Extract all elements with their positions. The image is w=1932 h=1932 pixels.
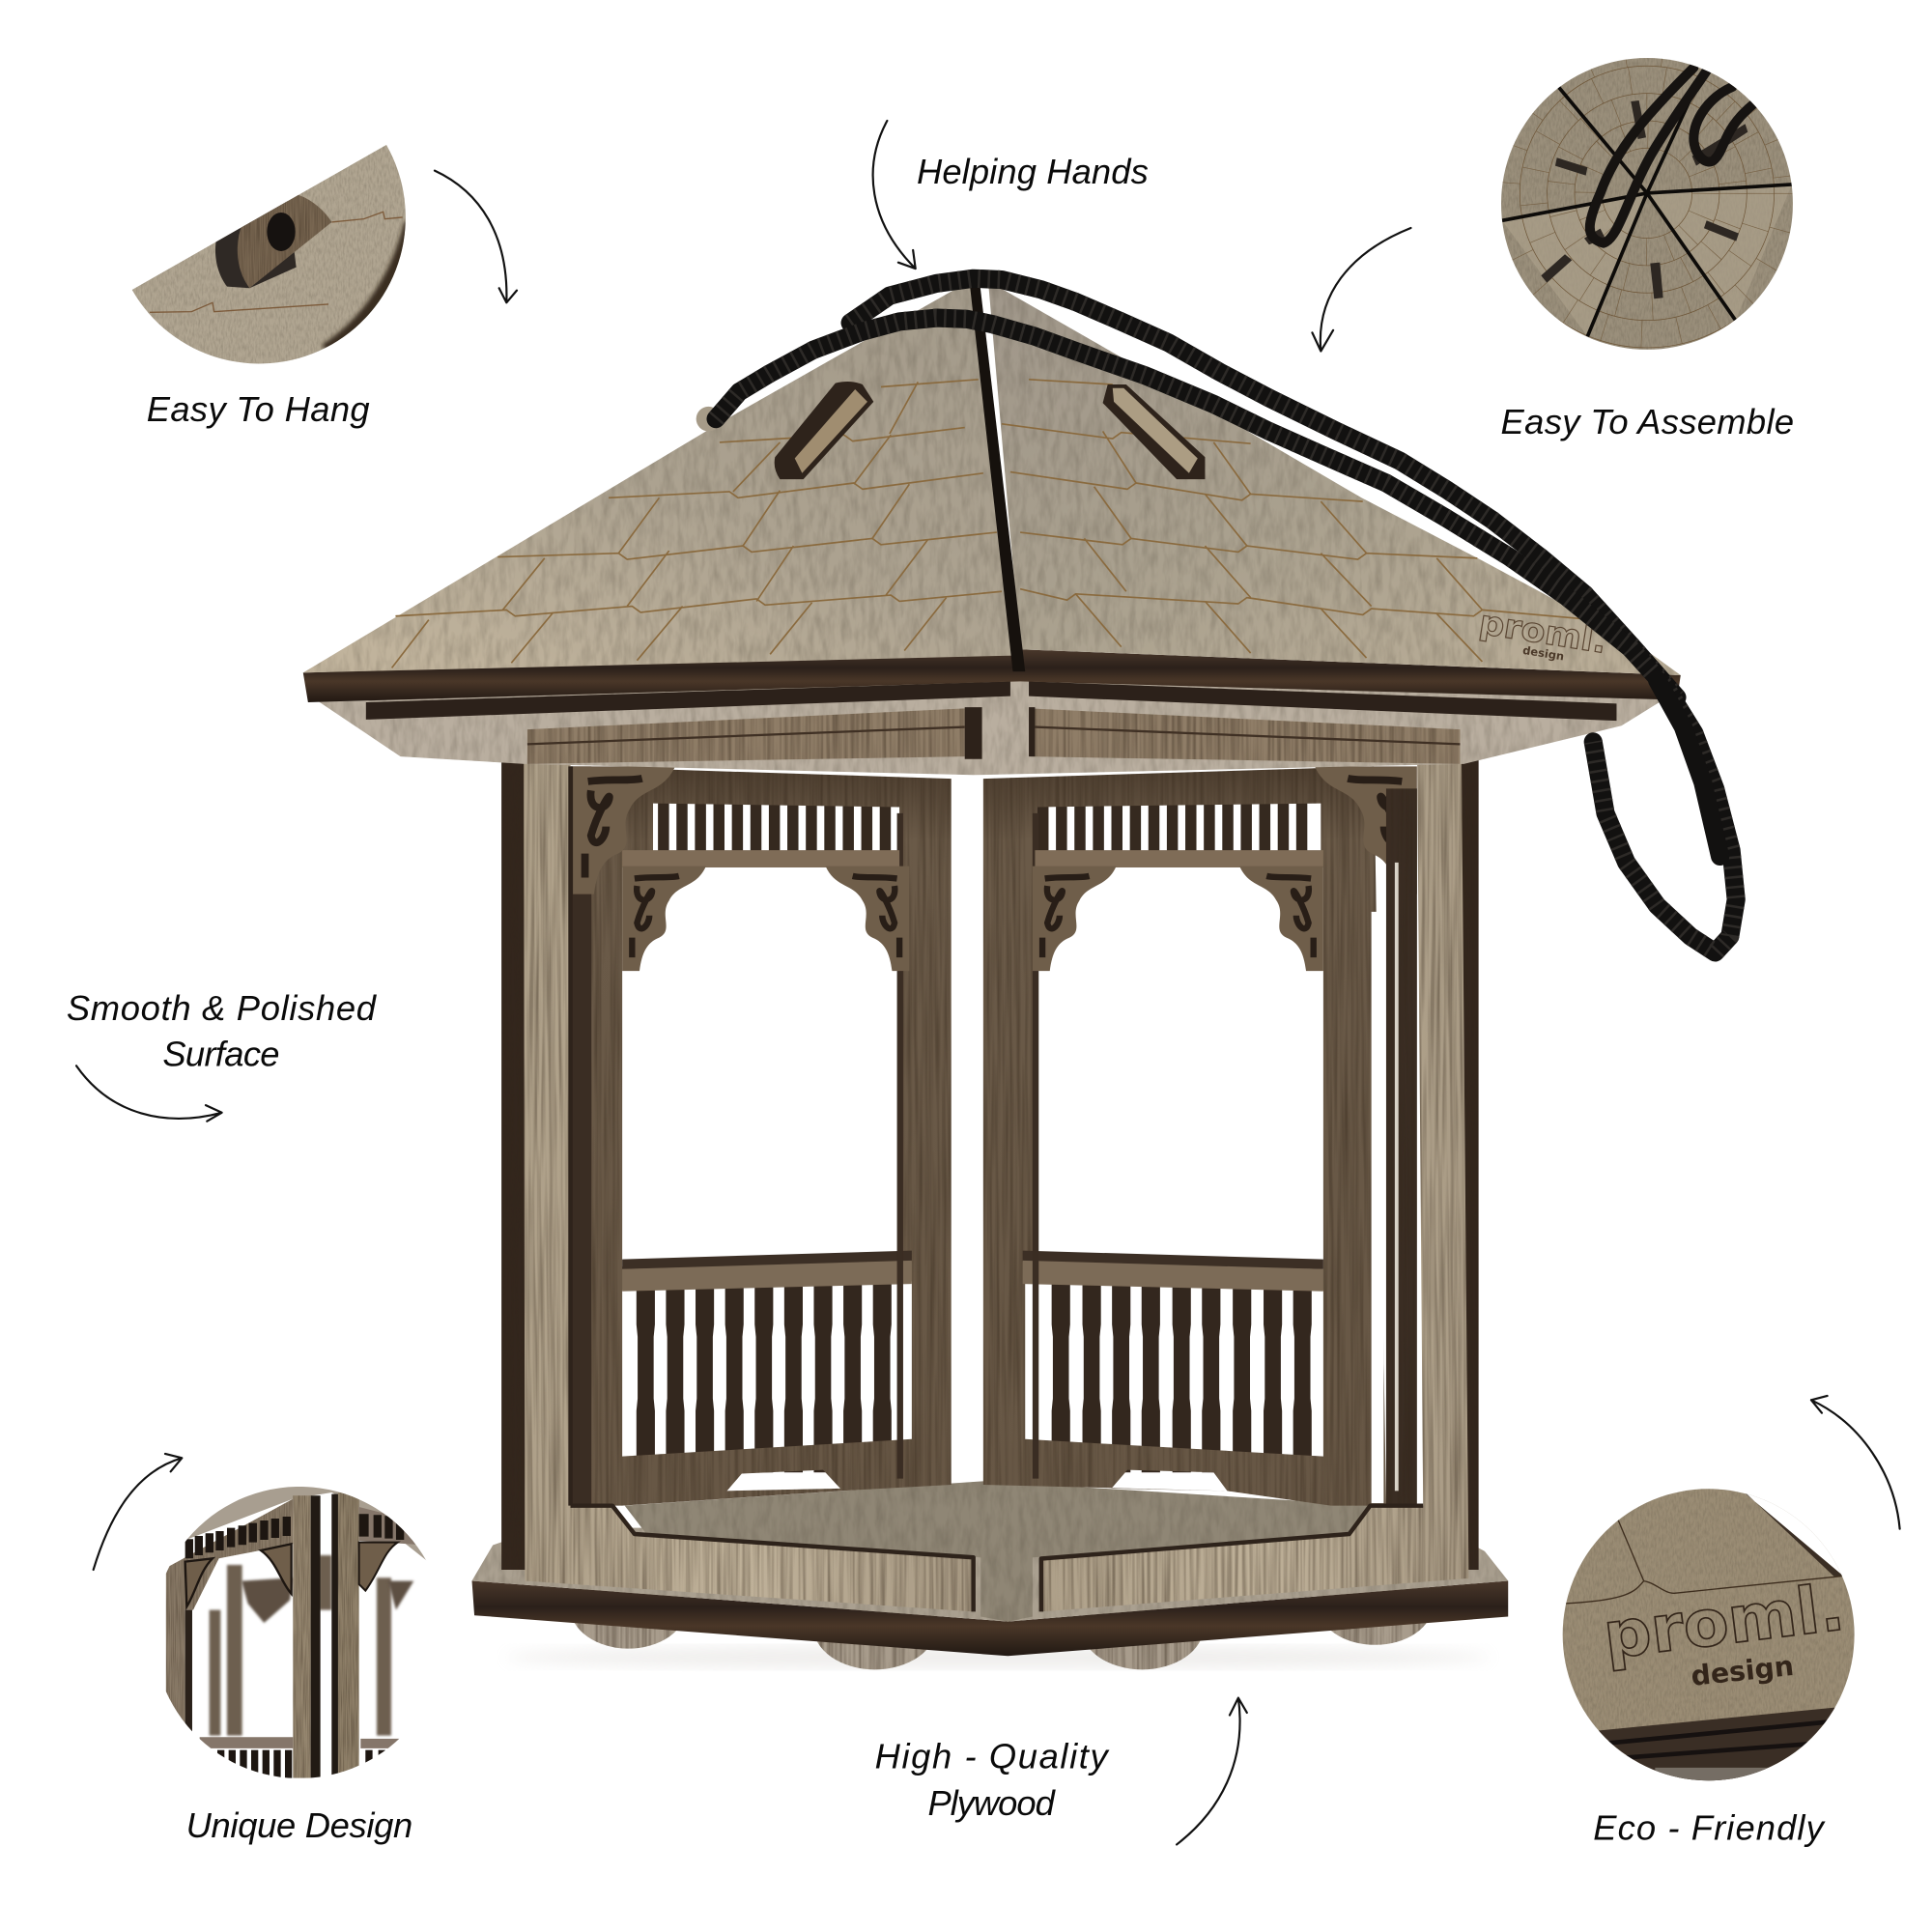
roof underside eave	[308, 671, 1667, 775]
detail circle: engraved logo: design	[1690, 1650, 1795, 1692]
gazebo bird feeder	[303, 278, 1736, 1669]
second roof strip	[366, 681, 1616, 721]
engraved logo on roof: design	[1521, 643, 1565, 664]
detail circle: engraved logo: proml.	[1600, 1570, 1848, 1673]
roof fascia	[303, 649, 1681, 702]
base plate top	[472, 1528, 1508, 1622]
outer corner brackets	[573, 766, 1417, 895]
left window panel	[571, 766, 952, 1506]
label: Smooth & Polished Surface	[67, 988, 378, 1073]
arrow: assemble	[1312, 228, 1410, 352]
label: High - Quality Plywood: High - Quality	[875, 1736, 1110, 1776]
arrow: helping hands	[873, 121, 916, 269]
wooden feet	[571, 1564, 1433, 1669]
wall top edges	[571, 766, 1423, 1611]
engraved logo on roof: proml.	[1477, 604, 1609, 662]
label: Smooth & Polished Surface: Surface	[162, 1034, 280, 1073]
upper grille slats	[658, 795, 1307, 863]
arrow: unique	[94, 1454, 182, 1570]
left corner post and wall	[524, 727, 974, 1611]
label: High - Quality Plywood	[875, 1736, 1110, 1823]
balusters left	[637, 1269, 892, 1472]
label: Easy To Hang: Easy To Hang	[147, 389, 370, 429]
right window panel	[983, 766, 1386, 1506]
inner brackets	[622, 867, 1323, 971]
black rope	[716, 278, 1736, 952]
label: Unique Design: Unique Design	[186, 1805, 412, 1845]
hanging knob	[696, 407, 721, 431]
base plate edge	[472, 1580, 1508, 1656]
detail circle: engraved logo	[1558, 1478, 1867, 1784]
label: Eco - Friendly: Eco - Friendly	[1593, 1807, 1826, 1847]
roof centre seam	[970, 281, 1025, 671]
callout: unique design	[94, 1454, 444, 1784]
detail circle: hanging disc	[131, 145, 406, 363]
label: High - Quality Plywood: Plywood	[927, 1783, 1057, 1823]
detail circle: roof from above	[1501, 58, 1793, 350]
roof vent left	[775, 382, 873, 479]
roof right face	[988, 281, 1681, 675]
frieze boards	[527, 707, 1460, 764]
label: Easy To Assemble: Easy To Assemble	[1501, 402, 1794, 441]
callout: easy to assemble	[1501, 58, 1793, 350]
balusters right	[1052, 1269, 1312, 1472]
floor	[625, 1481, 1375, 1622]
right corner post and wall	[1041, 734, 1468, 1611]
arrow: quality	[1177, 1698, 1247, 1844]
roof shingle lines	[392, 380, 1593, 668]
arrow: eco	[1811, 1396, 1900, 1529]
label: Smooth & Polished Surface: Smooth & Polished	[67, 988, 378, 1028]
right side lattice	[1372, 788, 1417, 1506]
roof left face	[303, 281, 1015, 672]
roof vent right	[1103, 384, 1205, 479]
arrow: smooth surface	[76, 1065, 222, 1122]
callout: eco friendly	[1558, 1396, 1900, 1784]
label: Helping Hands: Helping Hands	[917, 152, 1149, 191]
arrow: hang	[435, 171, 517, 302]
base shadow	[505, 1646, 1491, 1668]
outer dark strips	[501, 727, 1479, 1570]
callout: easy to hang	[116, 126, 517, 384]
panel shading	[571, 766, 1323, 1506]
detail circle: gazebo corner	[166, 1487, 427, 1778]
